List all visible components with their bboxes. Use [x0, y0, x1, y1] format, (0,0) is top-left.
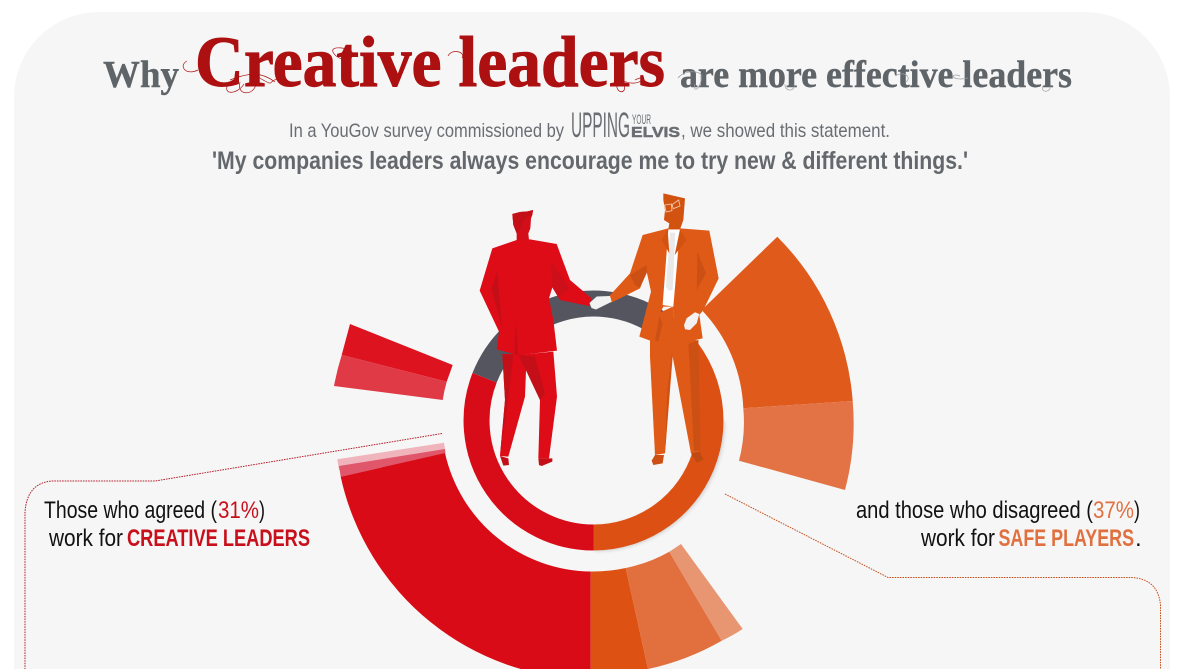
segment: lower orange	[591, 544, 743, 669]
intro text start: In a YouGov survey commissioned by	[289, 120, 564, 142]
callout line one: 31%	[218, 497, 259, 524]
segment: large red	[337, 443, 591, 669]
segment: upper right orange	[702, 237, 854, 490]
callout line one: )	[259, 497, 265, 524]
callout line one: and those who disagreed (	[856, 497, 1093, 524]
callout line two: SAFE PLAYERS	[998, 525, 1134, 552]
callout line one: )	[1134, 497, 1140, 524]
callout line two	[48, 525, 310, 552]
segment: left small red	[334, 324, 453, 400]
dotted leader: orange	[725, 494, 1160, 669]
illustration: two men shaking hands	[480, 193, 719, 466]
intro text end: , we showed this statement.	[681, 120, 890, 142]
logo: Upping Your Elvis: YOUR	[632, 111, 651, 127]
figure: orange man	[609, 193, 719, 465]
subtitle: survey intro	[289, 106, 890, 145]
chart: inner ring	[477, 304, 712, 538]
callout line two: work for	[48, 525, 123, 552]
logo: Upping Your Elvis: ELVIS	[631, 124, 680, 141]
ring arc: disagreed orange	[594, 325, 710, 538]
dotted leader: red	[25, 434, 442, 669]
title words: are more effective leaders: are more effective leaders	[680, 54, 1072, 96]
callout: agreed	[44, 497, 310, 552]
logo: Upping Your Elvis: UPPING	[571, 106, 630, 145]
callout line two: .	[1135, 525, 1142, 552]
callout line one: Those who agreed (	[44, 497, 217, 524]
ring arc: agreed red	[477, 378, 594, 538]
callout: disagreed	[856, 497, 1142, 552]
chart: outer radial segments	[334, 237, 854, 669]
callout line two: work for	[920, 525, 995, 552]
ring arc: neutral grey	[485, 304, 662, 378]
title flourishes	[183, 48, 1050, 93]
title words: Creative leaders: Creative leaders	[195, 22, 665, 102]
icon: white hand at hip	[684, 312, 699, 330]
callout line two: CREATIVE LEADERS	[127, 525, 310, 552]
statement quote: 'My companies leaders always encourage me to try new & different things.'	[212, 147, 968, 175]
title	[103, 22, 1072, 102]
title word: Why: Why	[103, 54, 179, 96]
callout line one: 37%	[1093, 497, 1134, 524]
icon: handshake hands	[590, 296, 612, 310]
figure: red man	[480, 210, 592, 466]
callout line two	[920, 525, 1142, 552]
